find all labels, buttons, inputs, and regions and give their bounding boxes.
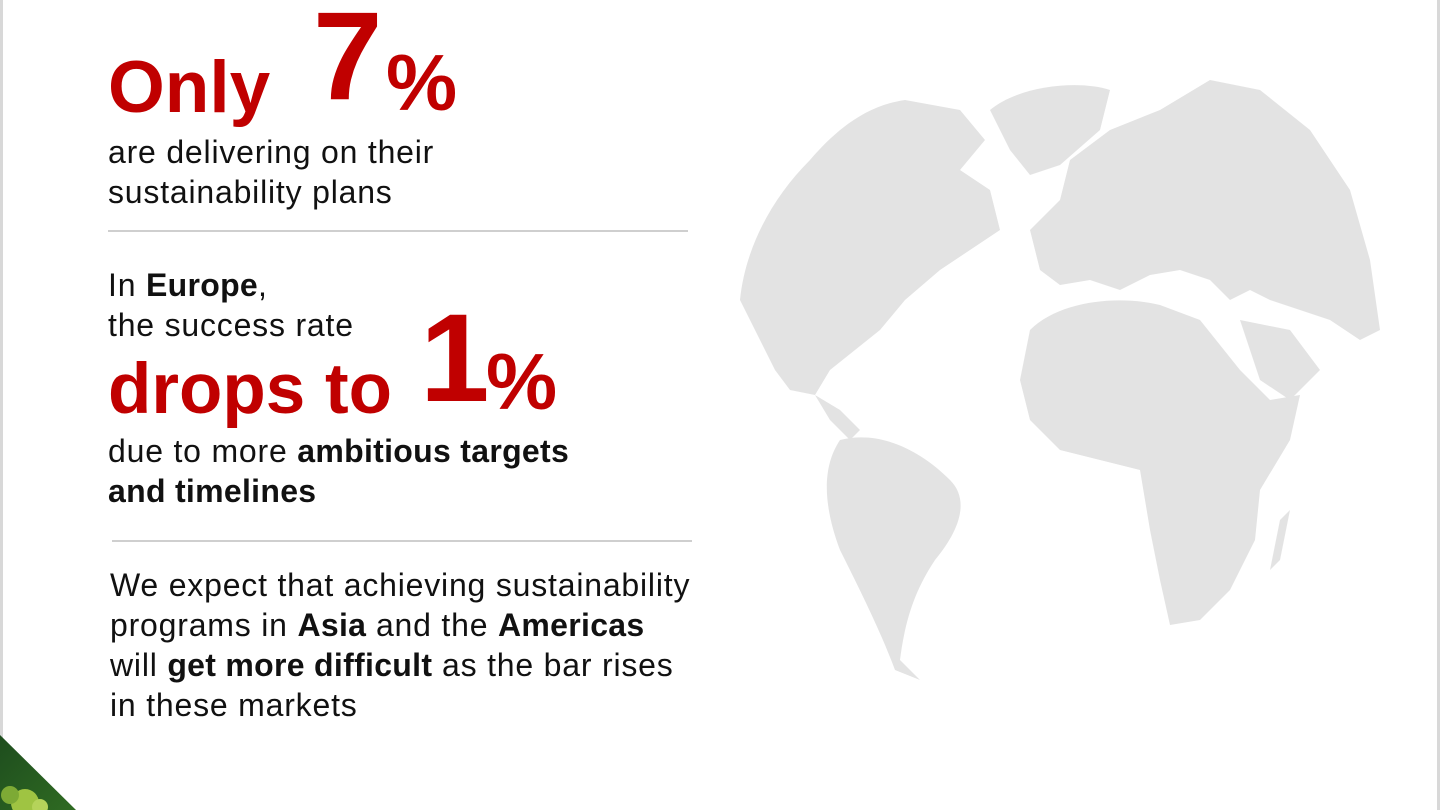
text: delivering: are delivering on their xyxy=(108,134,434,170)
image: foliage corner xyxy=(0,735,76,810)
text: Europe: In Europe, xyxy=(108,267,268,303)
text: delivering: sustainability plans xyxy=(108,174,393,210)
headline: drops to 1%: drops to xyxy=(108,350,392,429)
icon: globe map xyxy=(740,80,1380,680)
headline: Only 7%: % xyxy=(386,38,457,127)
text: outlook: programs in Asia and the Americas xyxy=(110,607,644,643)
text: ambitious targets: and timelines xyxy=(108,473,316,509)
text: ambitious targets: due to more ambitious targets xyxy=(108,433,569,469)
headline: Only 7%: Only xyxy=(108,47,270,128)
headline: drops to 1%: % xyxy=(486,337,557,426)
headline: drops to 1% xyxy=(108,289,557,429)
text: outlook xyxy=(110,567,690,723)
text: delivering xyxy=(108,134,434,210)
text: ambitious targets xyxy=(108,433,569,509)
headline: drops to 1%: 1 xyxy=(420,289,490,428)
text: Europe xyxy=(108,267,354,343)
text: outlook: We expect that achieving sustainability xyxy=(110,567,690,603)
frame borders xyxy=(0,0,3,810)
text: outlook: will get more difficult as the bar rises xyxy=(110,647,674,683)
text: Europe: the success rate xyxy=(108,307,354,343)
headline: Only 7% xyxy=(108,0,457,128)
text: outlook: in these markets xyxy=(110,687,358,723)
